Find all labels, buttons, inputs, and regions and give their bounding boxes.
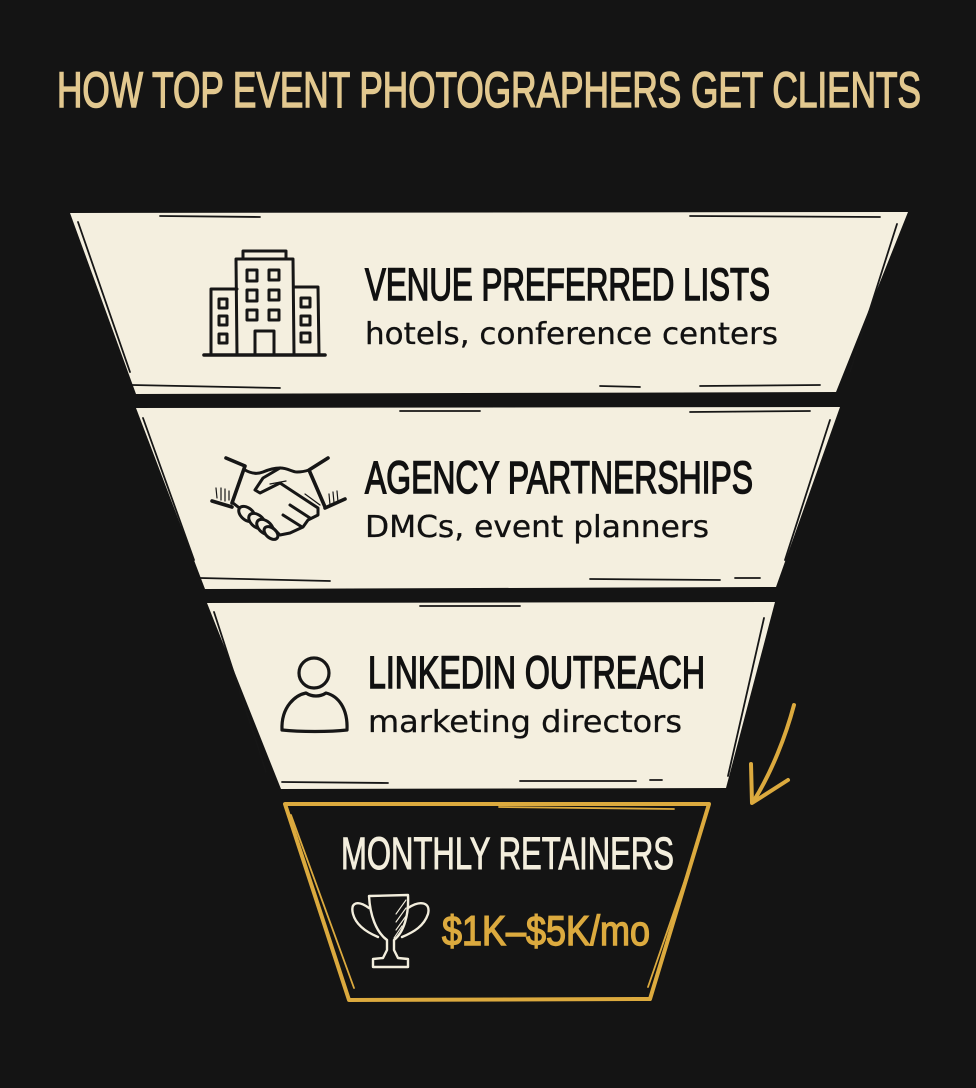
heading: VENUE PREFERRED LISTS: [365, 259, 770, 310]
panel: linkedin outreach: [207, 602, 775, 789]
subtext: DMCs, event planners: [365, 510, 709, 545]
arrow: [751, 705, 794, 803]
panel: monthly retainers: [285, 804, 709, 1000]
icon: trophy: [352, 895, 428, 967]
panel: venue preferred lists: [70, 212, 908, 394]
icon: handshake: [212, 458, 345, 542]
heading: AGENCY PARTNERSHIPS: [365, 452, 753, 503]
panel: agency partnerships: [136, 407, 840, 589]
subtext: marketing directors: [368, 705, 682, 740]
heading: LINKEDIN OUTREACH: [368, 647, 705, 698]
icon: person: [282, 658, 347, 732]
icon: office building: [204, 251, 325, 355]
subtext: hotels, conference centers: [365, 317, 778, 352]
price: $1K–$5K/mo: [442, 907, 650, 954]
heading: MONTHLY RETAINERS: [341, 828, 674, 879]
